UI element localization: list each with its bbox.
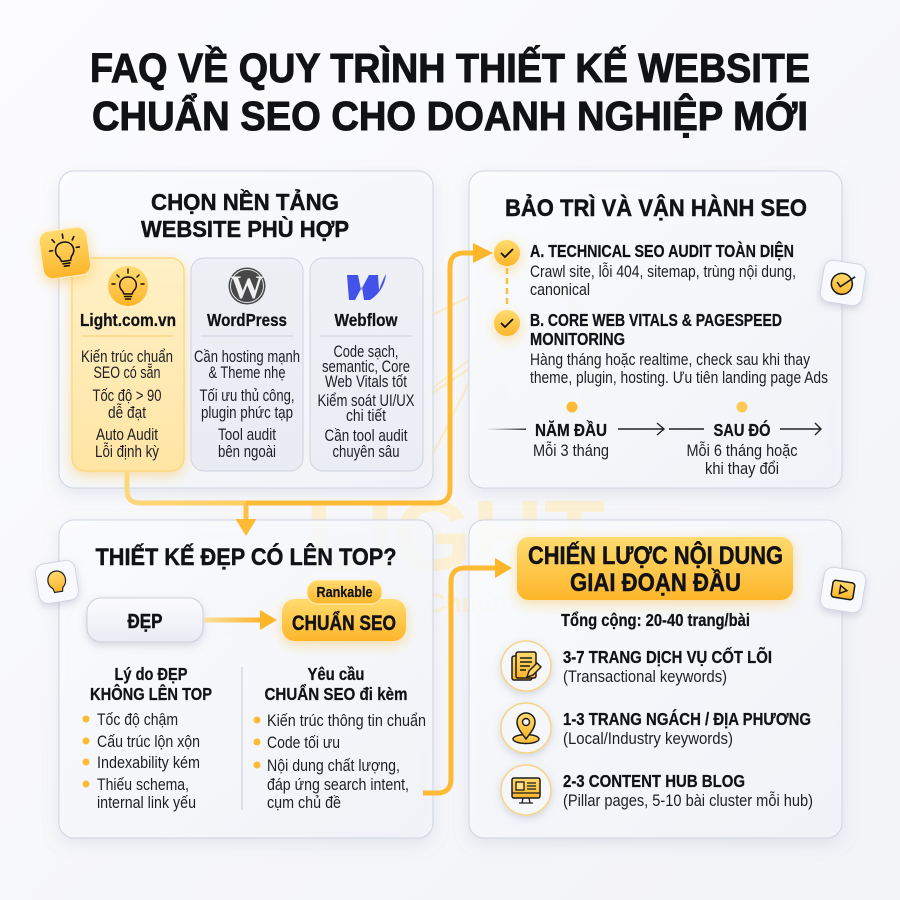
item B text: Hàng tháng hoặc realtime, check sau khi thay (530, 351, 811, 369)
column: lý do đẹp không lên top: KHÔNG LÊN TOP (90, 683, 212, 704)
item: content hub: 2-3 CONTENT HUB BLOG (563, 771, 745, 791)
timeline: năm đầu: NĂM ĐẦU (535, 419, 607, 440)
card: Light.com.vn (72, 258, 184, 471)
column: lý do đẹp không lên top: Tốc độ chậm (97, 711, 178, 729)
column: yêu cầu chuẩn seo đi kèm: CHUẨN SEO đi kèm (264, 683, 408, 704)
column: lý do đẹp không lên top: Thiếu schema, (97, 776, 189, 794)
label: Light.com.vn: Light.com.vn (80, 310, 176, 330)
banner: chiến lược nội dung (517, 537, 793, 600)
arrow: Light card to thiết kế đẹp (127, 471, 256, 536)
features: Light.com.vn: Auto Audit (96, 426, 158, 444)
features: Webflow: Code sạch, (334, 343, 398, 361)
features: Webflow: chi tiết (346, 407, 386, 425)
timeline: sau đó: khi thay đổi (705, 460, 779, 478)
features: Webflow: Kiểm soát UI/UX (318, 392, 414, 410)
features: Light.com.vn (81, 348, 173, 461)
item A text: A. TECHNICAL SEO AUDIT TOÀN DIỆN (530, 240, 794, 261)
label: WordPress: WordPress (207, 310, 287, 330)
item: trang ngách: 1-3 TRANG NGÁCH / ĐỊA PHƯƠNG (563, 708, 811, 729)
column: yêu cầu chuẩn seo đi kèm: Kiến trúc thông tin chuẩn (267, 712, 426, 730)
features: WordPress: bên ngoài (218, 443, 276, 461)
title (90, 45, 810, 139)
features: WordPress: Tối ưu thủ công, (200, 387, 294, 405)
panel: chọn nền tảng (38, 171, 433, 488)
timeline: sau đó: SAU ĐÓ (714, 419, 770, 440)
item B text: B. CORE WEB VITALS & PAGESPEED (530, 310, 782, 330)
features: WordPress: Tool audit (218, 426, 276, 444)
arrow: đẹp to chuẩn seo (204, 610, 277, 630)
total pages: Tổng cộng: 20-40 trang/bài (561, 610, 750, 630)
features: WordPress: Cần hosting mạnh (194, 348, 300, 366)
column: yêu cầu chuẩn seo đi kèm: Yêu cầu (308, 664, 364, 684)
heading: chọn nền tảng (141, 187, 349, 242)
features: Light.com.vn: dễ đạt (108, 403, 146, 422)
label: Webflow: Webflow (334, 310, 398, 330)
panel: chiến lược nội dung (469, 520, 867, 838)
heading: bảo trì: BẢO TRÌ VÀ VẬN HÀNH SEO (505, 193, 807, 222)
icon: check B (494, 310, 520, 336)
features: Light.com.vn: Lỗi định kỳ (95, 442, 160, 461)
column: lý do đẹp không lên top: Cấu trúc lộn xộn (97, 733, 200, 751)
features: Webflow: Cần tool audit (324, 427, 408, 445)
icon: map pin (501, 703, 551, 753)
column: lý do đẹp không lên top: internal link yếu (97, 794, 196, 812)
icon: check A (494, 240, 520, 266)
features: Webflow: chuyên sâu (332, 443, 400, 461)
icon: document edit (501, 641, 551, 691)
watermark: Light logo: Chuẩn (427, 588, 508, 618)
timeline (488, 402, 821, 478)
icon: Webflow logo (347, 274, 386, 300)
timeline: năm đầu: Mỗi 3 tháng (533, 441, 609, 460)
features: Light.com.vn: Tốc độ > 90 (92, 387, 162, 405)
timeline: sau đó: Mỗi 6 tháng hoặc (686, 441, 798, 460)
button: chuẩn seo (282, 599, 406, 641)
column: lý do đẹp không lên top: Indexability kém (97, 754, 200, 772)
title: CHUẨN SEO CHO DOANH NGHIỆP MỚI (92, 92, 808, 139)
item: trang ngách (563, 708, 811, 748)
card: Webflow (310, 258, 423, 471)
badge: rankable (307, 580, 382, 604)
icon: WordPress logo: W (230, 270, 264, 306)
features: Webflow: semantic, Core (322, 358, 410, 376)
panel: bảo trì và vận hành SEO (469, 171, 867, 488)
badge: rankable: Rankable (316, 584, 372, 601)
features: WordPress: & Theme nhẹ (208, 364, 286, 382)
icon badge: check (819, 259, 867, 307)
item A text: Crawl site, lỗi 404, sitemap, trùng nội dung, (530, 262, 796, 281)
item A text (530, 240, 796, 299)
column: lý do đẹp không lên top: Lý do ĐẸP (114, 664, 188, 684)
button: đẹp (87, 598, 203, 642)
banner: chiến lược nội dung: GIAI ĐOẠN ĐẦU (570, 568, 741, 597)
item: content hub (563, 771, 813, 810)
item A text: canonical (530, 281, 590, 299)
card: WordPress (191, 258, 303, 471)
column: yêu cầu chuẩn seo đi kèm: Nội dung chất lượng, (267, 757, 400, 775)
icon badge: bulb (38, 226, 92, 280)
icon: monitor (501, 765, 551, 815)
item B text: MONITORING (530, 329, 625, 349)
dashed connector between checks (506, 268, 508, 306)
column: lý do đẹp không lên top (82, 664, 212, 812)
heading: thiết kế đẹp: THIẾT KẾ ĐẸP CÓ LÊN TOP? (96, 543, 396, 571)
item B text: theme, plugin, hosting. Ưu tiên landing page Ads (530, 369, 828, 387)
features: WordPress: plugin phức tạp (201, 404, 293, 422)
column: yêu cầu chuẩn seo đi kèm: cụm chủ đề (267, 794, 341, 812)
panel: thiết kế đẹp có lên top (34, 520, 433, 838)
column: yêu cầu chuẩn seo đi kèm: Code tối ưu (267, 734, 340, 752)
icon: light bulb circle (108, 266, 148, 306)
item: trang ngách: (Local/Industry keywords) (563, 730, 733, 748)
watermark: Light logo: LIGHT (305, 480, 605, 592)
heading: chọn nền tảng: WEBSITE PHÙ HỢP (141, 215, 349, 242)
banner: chiến lược nội dung: CHIẾN LƯỢC NỘI DUNG (528, 540, 783, 570)
timeline: sau đó (686, 419, 798, 478)
features: Light.com.vn: SEO có sẵn (94, 363, 160, 382)
features: WordPress (194, 348, 300, 461)
features: Light.com.vn: Kiến trúc chuẩn (81, 348, 173, 366)
column: yêu cầu chuẩn seo đi kèm (254, 664, 426, 812)
item B text (530, 310, 828, 387)
timeline: năm đầu (533, 419, 609, 460)
item: trang dịch vụ: (Transactional keywords) (563, 668, 727, 686)
button: đẹp: ĐẸP (128, 611, 162, 633)
button: chuẩn seo: CHUẨN SEO (292, 612, 396, 635)
icon badge: bulb (34, 559, 80, 605)
arrow: to chiến lược nội dung (423, 558, 512, 793)
column: yêu cầu chuẩn seo đi kèm: đáp ứng search intent, (267, 776, 409, 794)
item: content hub: (Pillar pages, 5-10 bài cluster mỗi hub) (563, 791, 813, 810)
heading: chọn nền tảng: CHỌN NỀN TẢNG (151, 187, 339, 215)
item: trang dịch vụ: 3-7 TRANG DỊCH VỤ CỐT LÕI (563, 646, 772, 667)
title: FAQ VỀ QUY TRÌNH THIẾT KẾ WEBSITE (90, 45, 810, 91)
icon badge: play (819, 566, 867, 614)
features: Webflow (318, 343, 414, 461)
features: Webflow: Web Vitals tốt (325, 373, 407, 391)
arrow: to bảo trì (246, 243, 493, 503)
item: trang dịch vụ (563, 646, 772, 686)
watermark: Light logo (305, 282, 605, 618)
